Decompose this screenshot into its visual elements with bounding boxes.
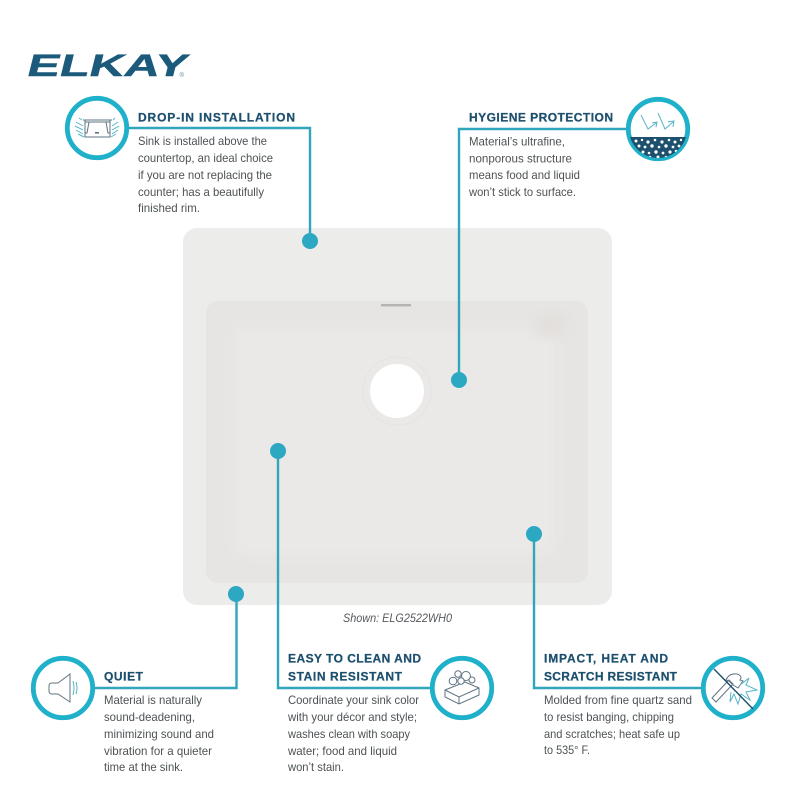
leader line [129,128,310,241]
heading: IMPACT, HEAT AND [544,652,668,666]
body text: vibration for a quieter [104,744,212,758]
leader line [459,129,628,380]
heading [288,652,421,684]
icon: speaker [33,658,93,718]
body text: counter; has a beautifully [138,185,264,199]
body text: finished rim. [138,201,200,215]
logo: Elkay [24,48,192,83]
body text: time at the sink. [104,760,183,774]
body text [104,693,214,774]
heading: HYGIENE PROTECTION [469,110,613,124]
heading: DROP-IN INSTALLATION [138,110,295,124]
body text: to 535° F. [544,743,590,757]
icon: soap [432,658,492,718]
drain hole [363,357,431,425]
sink deck [183,228,612,605]
logo: Elkay: ELKAY [24,48,192,83]
marker dot [270,443,286,459]
body text: Molded from fine quartz sand [544,693,692,707]
icon: drop-in sink [67,98,127,158]
icon: hammer crossed out [703,658,763,718]
callout: easy to clean and stain resistant [270,443,492,774]
body text: countertop, an ideal choice [138,151,273,165]
body text [468,134,580,199]
callout: quiet [33,586,244,774]
body text: Material is naturally [104,693,202,707]
callout: drop-in installation [67,98,318,249]
heading: EASY TO CLEAN AND [288,652,421,666]
logo: Elkay: ® [180,72,184,79]
body text: Material’s ultrafine, [469,134,565,148]
callout: impact, heat and scratch resistant [526,526,763,757]
sink product image [183,228,612,605]
marker dot [451,372,467,388]
body text: washes clean with soapy [287,727,410,741]
heading: SCRATCH RESISTANT [544,670,678,684]
leader line [534,534,702,688]
heading: QUIET [104,670,144,684]
body text: to resist banging, chipping [544,710,674,724]
body text: nonporous structure [469,152,572,166]
marker dot [526,526,542,542]
heading: STAIN RESISTANT [288,670,403,684]
body text: minimizing sound and [104,727,214,741]
sink basin [222,308,577,568]
body text: if you are not replacing the [138,168,272,182]
leader line [95,594,236,688]
small sink logo [381,304,411,306]
body text: won’t stick to surface. [468,185,576,199]
marker dot [302,233,318,249]
body text: Coordinate your sink color [288,693,419,707]
callout: hygiene protection [451,99,688,388]
body text: and scratches; heat safe up [544,727,680,741]
leader line [278,451,431,688]
icon: nonporous surface [628,99,688,161]
body text [287,693,419,774]
body text: water; food and liquid [287,744,397,758]
marker dot [228,586,244,602]
body text [138,134,273,215]
body text: won’t stain. [287,760,344,774]
body text [544,693,692,757]
body text: sound-deadening, [104,710,195,724]
heading [544,652,678,684]
body text: means food and liquid [469,168,580,182]
caption: Shown: ELG2522WH0 [343,611,452,625]
body text: Sink is installed above the [138,134,267,148]
body text: with your décor and style; [287,710,417,724]
